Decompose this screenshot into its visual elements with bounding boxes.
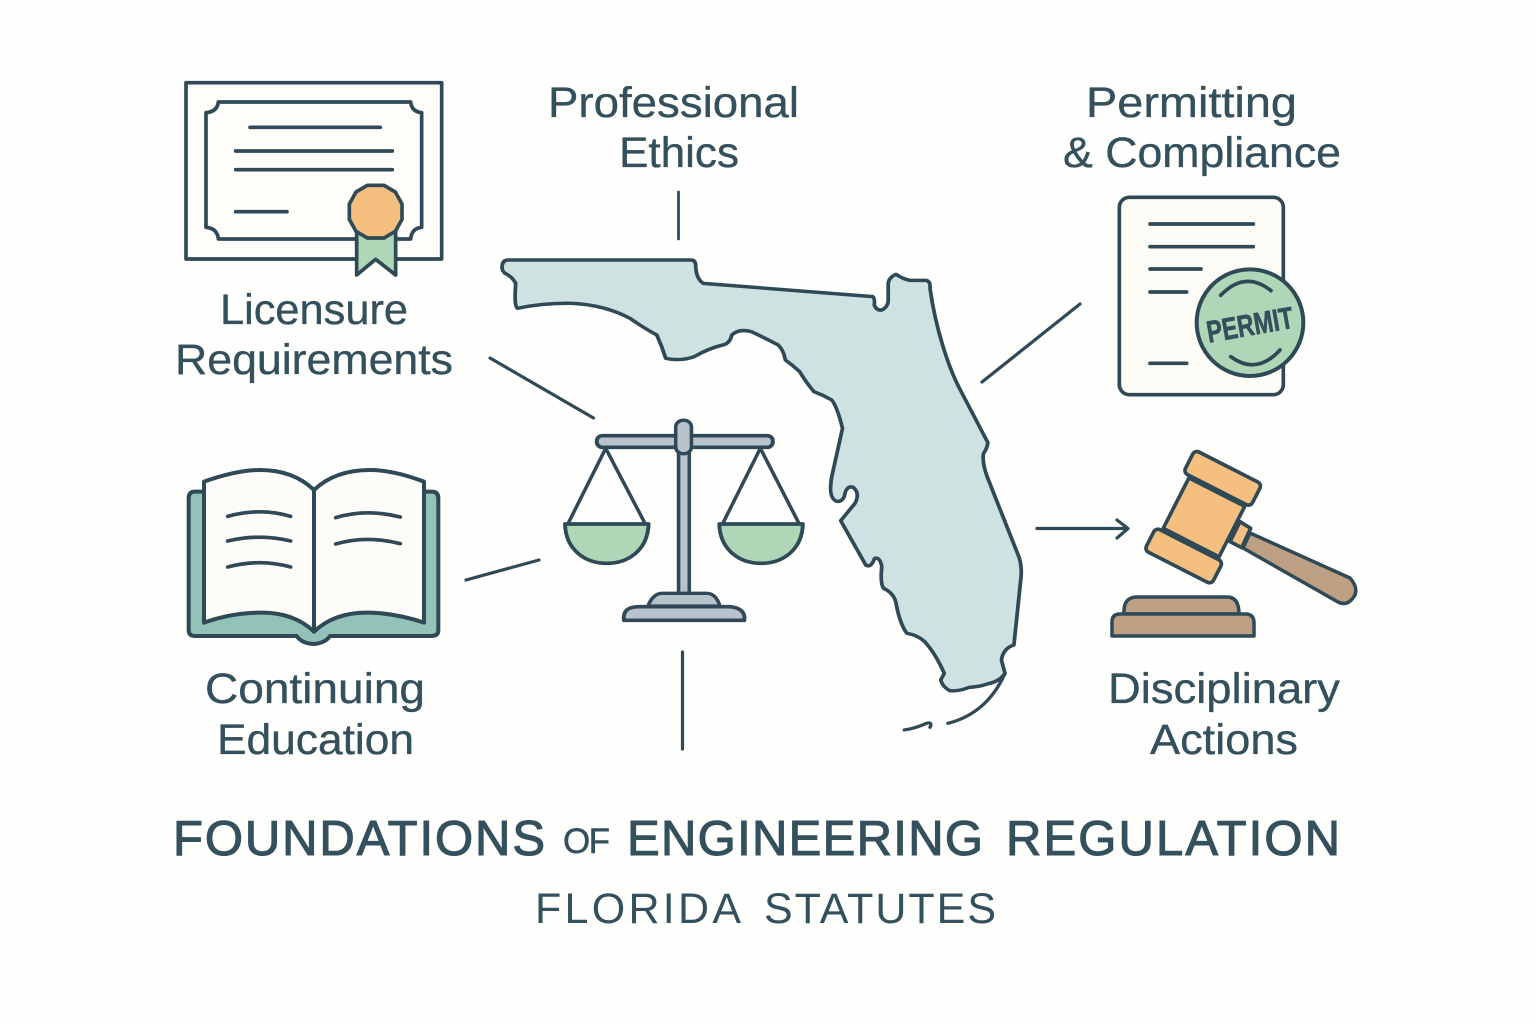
Florida map: [502, 260, 1021, 730]
bottom cap: [1144, 528, 1223, 584]
knob: [676, 420, 691, 454]
certificate inner border: [206, 102, 422, 239]
sound block top: [1124, 597, 1239, 614]
icon: scales of justice: [565, 420, 803, 620]
heading: Disciplinary Actions: Disciplinary: [1108, 665, 1341, 713]
certificate text lines: [236, 127, 392, 212]
connector: bottom vertical: [681, 652, 684, 749]
heading: Permitting & Compliance: Permitting: [1086, 79, 1297, 127]
lower base: [624, 607, 744, 620]
stamp arcs: [1221, 281, 1280, 365]
state outline: [502, 260, 1021, 691]
document page: [1119, 197, 1283, 395]
right page: [314, 470, 424, 632]
title: OF: [563, 822, 610, 861]
heading: Licensure Requirements: Requirements: [175, 336, 453, 384]
arrow: to disciplinary actions: [1037, 520, 1128, 538]
title: FOUNDATIONS: [173, 812, 545, 866]
Florida Keys: [904, 673, 1005, 730]
heading: Continuing Education: Education: [217, 716, 414, 764]
subtitle: STATUTES: [764, 885, 996, 933]
heading: Permitting & Compliance: & Compliance: [1063, 129, 1341, 177]
icon: open book: [189, 470, 438, 644]
ribbon: [357, 230, 396, 275]
document lines: [1150, 224, 1253, 363]
top cap: [1183, 450, 1262, 507]
connector: education to centre: [466, 560, 539, 580]
title: [173, 812, 1340, 866]
heading: Licensure Requirements: [175, 286, 453, 384]
upper base: [648, 593, 720, 606]
seal: [349, 185, 402, 238]
heading: Professional Ethics: [548, 79, 799, 177]
right pan: [719, 524, 803, 563]
connector: licensure to centre: [490, 358, 594, 418]
icon: certificate: [186, 83, 442, 275]
title: ENGINEERING: [627, 812, 983, 866]
sound block base: [1112, 614, 1254, 636]
beam: [597, 436, 773, 447]
subtitle: FLORIDA: [535, 885, 741, 933]
handle: [1243, 533, 1356, 603]
connector: permitting to centre: [982, 304, 1080, 382]
left pan: [565, 524, 649, 563]
stamp text: PERMIT: [1204, 301, 1296, 350]
heading: Professional Ethics: Ethics: [619, 129, 739, 177]
icon: permit document: [1119, 197, 1303, 395]
subtitle: [535, 885, 996, 933]
book cover: [189, 492, 438, 644]
book text lines: [228, 512, 400, 567]
heading: Continuing Education: Continuing: [205, 665, 425, 713]
connector: ethics to centre: [677, 192, 680, 239]
gavel body: [1163, 478, 1245, 557]
stamp circle: [1197, 269, 1303, 376]
heading: Permitting & Compliance: [1063, 79, 1341, 177]
certificate outer frame: [186, 83, 442, 259]
left page: [204, 470, 314, 632]
heading: Disciplinary Actions: Actions: [1150, 716, 1298, 764]
icon: gavel: [1112, 450, 1356, 636]
post: [679, 450, 689, 595]
neck: [1230, 522, 1251, 548]
title: REGULATION: [1006, 812, 1340, 866]
heading: Continuing Education: [205, 665, 425, 764]
left and right pan cords: [568, 448, 799, 523]
heading: Disciplinary Actions: [1108, 665, 1341, 764]
heading: Professional Ethics: Professional: [548, 79, 799, 127]
heading: Licensure Requirements: Licensure: [220, 286, 408, 334]
